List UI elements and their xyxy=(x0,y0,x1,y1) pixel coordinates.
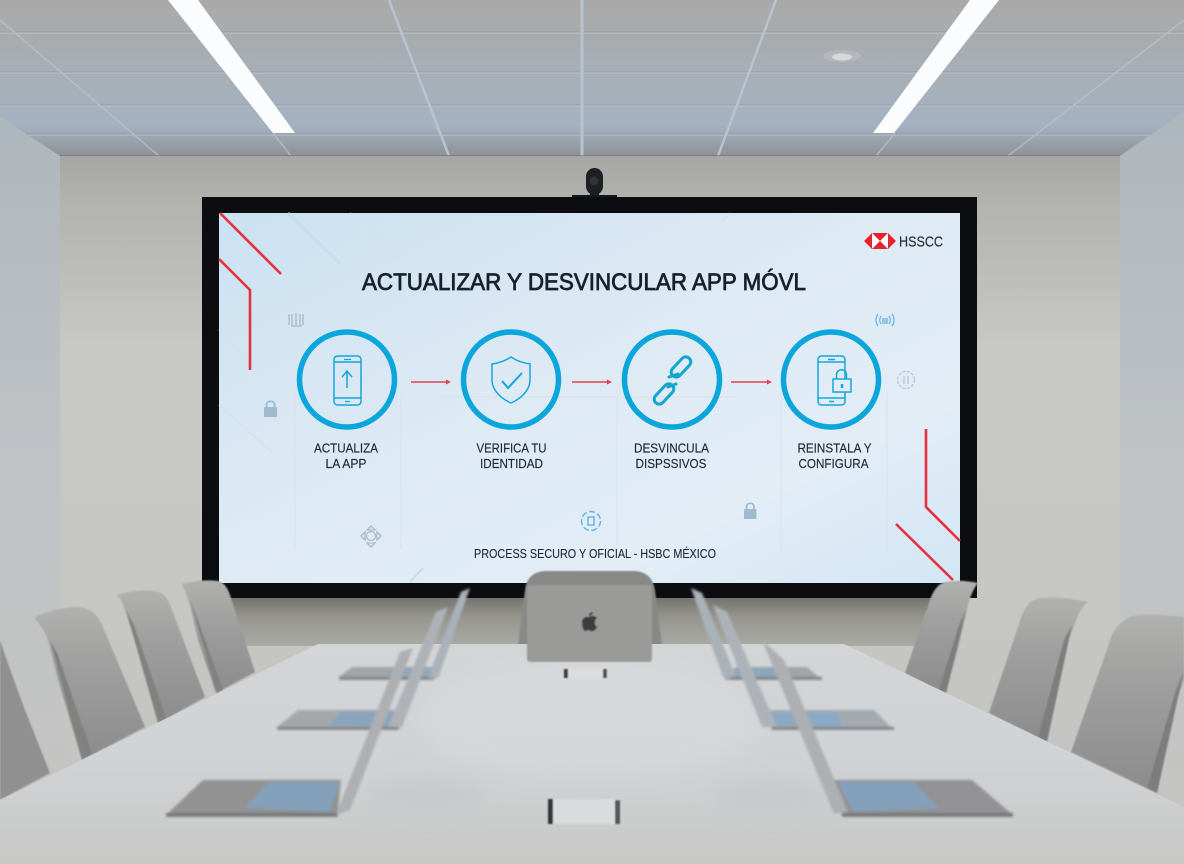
footer text: PROCESS SECURO Y OFICIAL - HSBC MÉXICO xyxy=(474,546,716,561)
logo: HSSCC: HSSCC xyxy=(899,234,943,250)
arrow 2 to 3 xyxy=(572,380,612,384)
faint icon: fingerprint glyph top left xyxy=(289,313,303,326)
laptop left near xyxy=(166,648,413,817)
laptops on left side of table xyxy=(166,588,470,817)
step 2 label: IDENTIDAD xyxy=(480,457,543,471)
smoke detector xyxy=(823,50,861,62)
icon: phone with up arrow xyxy=(334,356,361,405)
ceiling xyxy=(0,0,1184,156)
faint icon: padlock right xyxy=(744,503,756,519)
laptop right middle xyxy=(713,605,894,730)
conference camera xyxy=(572,168,617,199)
chairs left xyxy=(0,580,255,800)
step 1 label: LA APP xyxy=(326,457,366,471)
step 3 label: DISPSSIVOS xyxy=(636,457,706,471)
back wall xyxy=(60,156,1120,800)
ceiling light right xyxy=(873,0,999,133)
faint icon: directional pad xyxy=(361,526,381,547)
step 2: verifica tu identidad xyxy=(464,332,558,471)
icon: phone with padlock xyxy=(818,356,851,405)
conference table xyxy=(0,644,1184,864)
step 1: actualiza la app xyxy=(300,332,394,471)
presentation screen xyxy=(219,213,960,583)
centre laptop xyxy=(527,585,652,662)
icon: apple logo on laptop lid xyxy=(582,612,597,631)
laptop right far xyxy=(691,588,822,680)
shadow under screen xyxy=(205,598,950,646)
step 3 ring xyxy=(624,332,720,427)
chairs right xyxy=(905,581,1184,793)
chair behind centre laptop xyxy=(518,571,662,645)
step 3: desvincula dispositivos xyxy=(624,332,720,471)
step 1 label: ACTUALIZA xyxy=(314,442,379,456)
left wall xyxy=(0,117,60,800)
faint icon: wifi signal xyxy=(876,314,894,326)
arrow 3 to 4 xyxy=(731,380,772,384)
icon: shield with check xyxy=(492,357,530,403)
laptops on right side of table xyxy=(691,588,1013,817)
ceiling light left xyxy=(168,0,295,133)
laptop left middle xyxy=(277,607,448,730)
step 4: reinstala y configura xyxy=(784,332,878,471)
faint icon: padlock left xyxy=(264,401,277,417)
step 4 label: REINSTALA Y xyxy=(798,442,872,456)
logo: HSSCC xyxy=(864,233,943,250)
table cable port front xyxy=(548,799,620,824)
table reflection and shadows xyxy=(365,660,830,811)
step 3 label: DESVINCULA xyxy=(634,442,710,456)
title: ACTUALIZAR Y DESVINCULAR APP MÓVL xyxy=(362,269,806,296)
icon: broken chain link xyxy=(652,355,693,406)
step 1 ring xyxy=(300,332,394,427)
right wall xyxy=(1120,112,1184,810)
step 4 ring xyxy=(784,332,878,427)
faint icon: signal center xyxy=(582,512,600,530)
laptop left far xyxy=(339,588,470,680)
table cable port centre xyxy=(564,669,608,678)
laptop right near xyxy=(762,640,1013,817)
arrow 1 to 2 xyxy=(411,380,451,384)
step 2 ring xyxy=(464,332,558,427)
step 2 label: VERIFICA TU xyxy=(476,442,546,456)
faint icon: round badge xyxy=(898,372,914,388)
screen bezel xyxy=(202,197,977,598)
step 4 label: CONFIGURA xyxy=(798,457,869,471)
red corner accents xyxy=(219,213,960,580)
